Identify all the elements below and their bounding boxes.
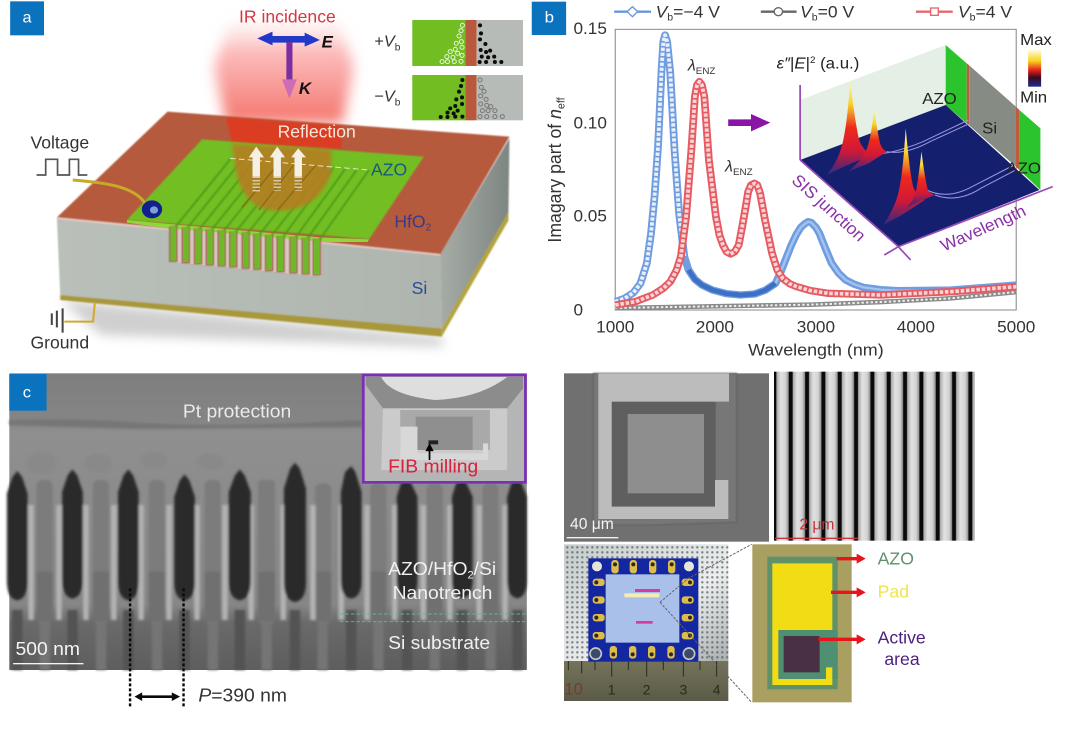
inset labels: Min	[1020, 89, 1047, 107]
AZO layer	[127, 139, 424, 239]
inset labels: (a.u.)	[815, 55, 859, 72]
SEM top view pad: 40 μm	[570, 516, 614, 533]
panel b: chart	[532, 2, 1053, 359]
zoom connector lines	[660, 544, 752, 702]
x tick labels: 1000	[596, 318, 634, 336]
Si label: Si	[412, 278, 427, 298]
panel c: cross-section SEM	[7, 373, 527, 708]
inset labels: 2	[810, 55, 815, 66]
beam spot on HfO2	[226, 117, 342, 148]
chip photograph: 3	[679, 681, 687, 697]
reflected light arrows	[249, 147, 306, 193]
SEM grating: 2 μm	[799, 516, 834, 533]
HfO2 label: HfO	[394, 211, 426, 231]
lambda ENZ labels: λ	[688, 58, 696, 75]
panel d: device images	[564, 372, 975, 702]
panel label c	[9, 374, 47, 411]
x axis title: Wavelength (nm)	[748, 340, 884, 359]
SEM image	[7, 373, 527, 670]
legend: V	[656, 3, 669, 21]
inset labels: ε″|E|	[777, 55, 810, 72]
x tick labels: 2000	[696, 318, 734, 336]
junction dashed lines	[340, 614, 526, 622]
colour bar	[1028, 50, 1041, 87]
lambda ENZ labels: ENZ	[696, 66, 716, 77]
Wavelength axis label: Wavelength	[937, 202, 1029, 255]
panel label b	[532, 2, 566, 35]
polarization arrows E and K: K	[299, 79, 313, 98]
dashed top edge of grating	[230, 158, 369, 170]
carrier inset -Vb: b	[395, 98, 401, 109]
panel label a: a	[23, 9, 32, 27]
y axis title: Imagary part of n	[544, 109, 565, 243]
chip photograph: 1	[608, 681, 616, 697]
grating lines over beam	[242, 163, 315, 210]
panel a: device schematic	[10, 1, 523, 352]
curve Vb=4 V	[615, 82, 1016, 305]
y tick labels: 0.15	[573, 19, 607, 38]
optical micrograph	[752, 544, 852, 702]
nanotrench comb	[170, 227, 322, 277]
infrared beam	[214, 20, 354, 123]
Pad callout: Pad	[878, 582, 909, 602]
IR incidence label: IR incidence	[239, 7, 336, 27]
grating lines	[174, 159, 369, 241]
Active area callout	[818, 627, 926, 669]
Pt protection label: Pt protection	[183, 402, 291, 422]
period markers	[130, 588, 184, 708]
carrier inset +Vb: +V	[374, 33, 395, 51]
nanotrench label: Nanotrench	[393, 583, 492, 604]
ground	[30, 303, 95, 352]
inset labels: Si	[982, 120, 997, 137]
contact dot	[142, 200, 162, 218]
x tick labels	[596, 318, 1035, 336]
beam spot on AZO	[232, 144, 331, 211]
nanotrench label: 2	[468, 569, 474, 581]
panel label a	[10, 1, 44, 35]
AZO label: AZO	[371, 160, 407, 180]
lambda ENZ labels: λ	[725, 159, 733, 176]
HfO2 label: 2	[426, 223, 432, 234]
ground: Ground	[30, 332, 89, 352]
chip photograph: 4	[713, 681, 721, 697]
carrier inset +Vb: b	[395, 43, 401, 54]
Pad callout	[831, 582, 909, 602]
AZO callout: AZO	[878, 548, 914, 568]
voltage source: Voltage	[30, 132, 89, 152]
legend: b	[667, 13, 673, 24]
y tick labels	[573, 19, 607, 320]
panel label c: c	[23, 384, 31, 402]
legend: =4 V	[976, 3, 1013, 21]
carrier inset +Vb	[374, 20, 523, 66]
lambda ENZ labels: ENZ	[733, 167, 753, 178]
3D field inset	[800, 45, 1053, 260]
legend: V	[958, 3, 971, 21]
carrier inset -Vb: −V	[374, 88, 395, 106]
inset labels: AZO	[1006, 160, 1041, 177]
curve Vb=-4 V	[615, 35, 1016, 302]
Reflection label: Reflection	[278, 121, 356, 141]
SEM grating	[774, 372, 975, 541]
plot frame	[615, 29, 1016, 310]
SIS junction axis label: SIS junction	[788, 171, 870, 245]
scale bar 500 nm: 500 nm	[16, 639, 80, 660]
device block	[57, 112, 509, 337]
purple arrow	[728, 114, 770, 131]
Active area callout: area	[884, 649, 920, 669]
legend	[614, 3, 1013, 24]
y tick labels: 0.05	[573, 207, 607, 226]
inset labels	[777, 31, 1053, 177]
chip photograph: 2	[643, 681, 651, 697]
voltage source	[30, 132, 146, 204]
chip photograph: 10	[564, 679, 583, 698]
inset labels: AZO	[922, 90, 957, 108]
chip photograph	[564, 544, 728, 701]
period arrow	[135, 692, 180, 701]
curve Vb=0 V	[615, 292, 1016, 308]
y tick labels: 0	[573, 301, 583, 320]
y axis title: eff	[555, 96, 567, 109]
device block shadow	[60, 300, 443, 347]
y tick labels: 0.10	[573, 114, 607, 132]
carrier inset -Vb	[374, 75, 523, 120]
legend: b	[970, 13, 976, 24]
inset labels: Max	[1020, 31, 1053, 49]
nanotrench label: AZO/HfO	[388, 559, 468, 580]
x tick labels: 3000	[797, 318, 835, 336]
lambda ENZ labels	[687, 58, 753, 178]
legend: V	[800, 3, 813, 21]
period label: P=390 nm	[198, 686, 287, 707]
Active area callout: Active	[878, 627, 926, 647]
AZO front edge	[127, 220, 369, 242]
x tick labels: 5000	[997, 318, 1035, 336]
AZO callout	[837, 548, 914, 568]
legend: =−4 V	[673, 3, 721, 21]
legend: b	[812, 13, 818, 24]
legend: =0 V	[818, 3, 855, 21]
panel label b: b	[545, 9, 554, 27]
Si substrate label: Si substrate	[388, 633, 490, 654]
FIB inset: FIB milling	[388, 457, 478, 477]
nanotrench label	[388, 559, 496, 604]
polarization arrows E and K	[257, 32, 334, 99]
SEM top view pad	[564, 373, 769, 542]
nanotrench label: /Si	[474, 559, 496, 580]
x tick labels: 4000	[897, 318, 935, 336]
polarization arrows E and K: E	[322, 32, 334, 51]
FIB inset	[363, 375, 525, 482]
